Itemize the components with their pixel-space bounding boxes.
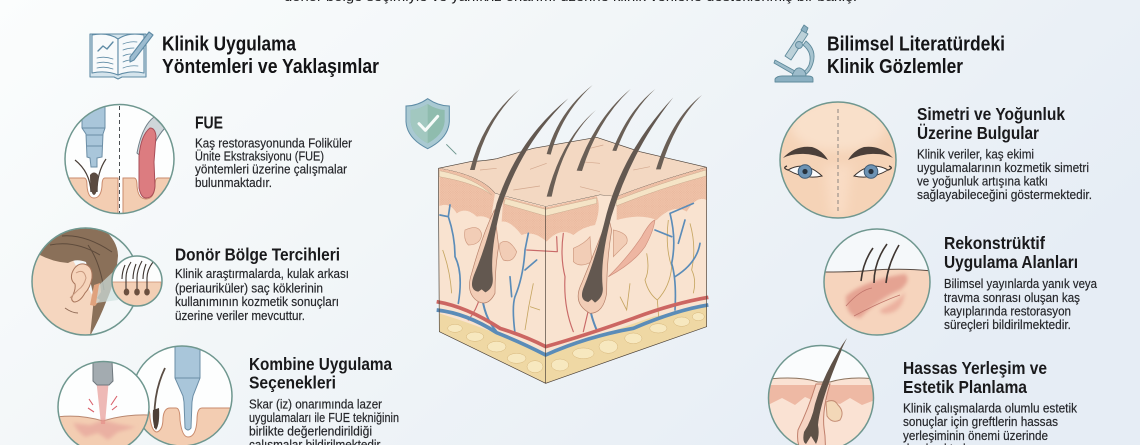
text: precise placement: yerleşiminin önemi üzerinde: [903, 428, 1048, 443]
text: precise placement: Hassas Yerleşim ve: [903, 358, 1047, 378]
hair follicle right: [578, 217, 612, 313]
heading: Bilimsel Literatürdeki: [827, 34, 1005, 78]
icon: hair follicle cross-section: [768, 338, 875, 445]
skin faces: [438, 167, 707, 383]
text: reconstructive: Rekonstrüktif: [944, 233, 1045, 253]
text: FUE: bulunmaktadır.: [195, 175, 272, 190]
text: combined options: Kombine Uygulama: [249, 354, 392, 374]
heading: Klinik Uygulama: Klinik Uygulama: [162, 34, 297, 56]
red arteries: [468, 233, 590, 332]
text: symmetry: Klinik veriler, kaş ekimi: [917, 146, 1034, 162]
left column: clinical methods: [30, 32, 399, 445]
left column header: [90, 32, 379, 79]
blue veins: [440, 203, 700, 333]
epidermis layers: [439, 168, 495, 220]
text: combined options: Seçenekleri: [249, 372, 336, 392]
text: FUE: FUE: [195, 112, 223, 132]
icon: FUE punch circle: [130, 346, 235, 445]
skin block: [437, 85, 708, 383]
arrector muscle: [608, 220, 655, 277]
text: combined options: birlikte değerlendirildiği: [249, 424, 372, 438]
icon: head with ear and follicle inset: [30, 226, 162, 340]
icon: scarred skin with hairs: [822, 229, 932, 340]
text: reconstructive: Bilimsel yayınlarda yanık veya: [944, 276, 1098, 291]
item: donor area: [30, 226, 349, 340]
text: precise placement: Estetik Planlama: [903, 377, 1027, 397]
icon: open book and pen: [90, 32, 153, 79]
hair follicle left: [469, 210, 499, 303]
skin top surface: [438, 137, 707, 207]
icon: laser circle: [56, 361, 150, 445]
text: reconstructive: travma sonrası oluşan kaş: [944, 290, 1080, 305]
text: precise placement: Klinik çalışmalarda olumlu estetik: [903, 400, 1077, 416]
fat layer: [439, 307, 707, 383]
right column header: [774, 25, 1005, 82]
icon: eyes and brows on face: [780, 99, 896, 218]
text: combined options: [249, 354, 399, 445]
text: FUE: Kaş restorasyonunda Foliküler: [195, 136, 353, 150]
text: combined options: Skar (iz) onarımında lazer: [249, 396, 383, 412]
icon: FUE punch and graft circle: [62, 100, 175, 215]
block outline: [438, 167, 707, 383]
text: donor area: (periauriküler) saç köklerinin: [175, 280, 323, 296]
text: FUE: yöntemleri üzerine çalışmalar: [195, 162, 348, 176]
heading: Klinik Uygulama: [162, 34, 379, 78]
right column: scientific observations: [768, 25, 1098, 445]
text: precise placement: sonuçlar için greftlerin hassas: [903, 414, 1058, 429]
text: symmetry: ve yoğunluk artışına katkı: [917, 174, 1048, 188]
hair shaft right: [582, 97, 673, 303]
heading: Klinik Uygulama: Yöntemleri ve Yaklaşımlar: [162, 56, 379, 78]
text: reconstructive: Uygulama Alanları: [944, 252, 1078, 272]
hair shaft left: [472, 98, 568, 292]
text: reconstructive: kayıplarında restorasyon: [944, 304, 1071, 318]
text: FUE: Ünite Ekstraksiyonu (FUE): [195, 148, 324, 164]
text: donor area: Klinik araştırmalarda, kulak arkası: [175, 266, 349, 281]
text: donor area: kullanımının kozmetik sonuçları: [175, 294, 339, 309]
icon: shield with check: [406, 99, 456, 154]
text: donor area: [175, 244, 349, 323]
text: reconstructive: süreçleri bildirilmektedir.: [944, 317, 1071, 332]
text: symmetry: uygulamalarının kozmetik simetri: [917, 160, 1089, 175]
text: precise placement: [903, 358, 1077, 445]
text: symmetry: [917, 104, 1092, 202]
center: skin cross-section: [406, 85, 708, 383]
heading: Bilimsel Literatürdeki: Bilimsel Literatürdeki: [827, 34, 1005, 56]
text: symmetry: Simetri ve Yoğunluk: [917, 104, 1065, 124]
short hairs: [470, 85, 702, 197]
text: donor area: üzerine veriler mevcuttur.: [175, 308, 305, 323]
icon: microscope: [774, 25, 814, 82]
item: FUE: [62, 100, 353, 215]
text: symmetry: sağlayabileceğini göstermektedir.: [917, 187, 1092, 202]
item: precise placement: [768, 338, 1077, 445]
text: donor area: Donör Bölge Tercihleri: [175, 244, 340, 264]
text: symmetry: Üzerine Bulgular: [917, 123, 1039, 143]
item: combined options: [56, 346, 399, 445]
text: combined options: uygulamaları ile FUE tekniğinin: [249, 410, 399, 425]
heading: Bilimsel Literatürdeki: Klinik Gözlemler: [827, 56, 963, 78]
text: reconstructive: [944, 233, 1098, 332]
vessels band: [437, 297, 708, 347]
item: symmetry: [780, 99, 1092, 218]
item: reconstructive: [822, 229, 1098, 340]
nerves: [443, 220, 695, 330]
sebaceous glands: [465, 228, 627, 265]
text: FUE: [195, 112, 353, 190]
